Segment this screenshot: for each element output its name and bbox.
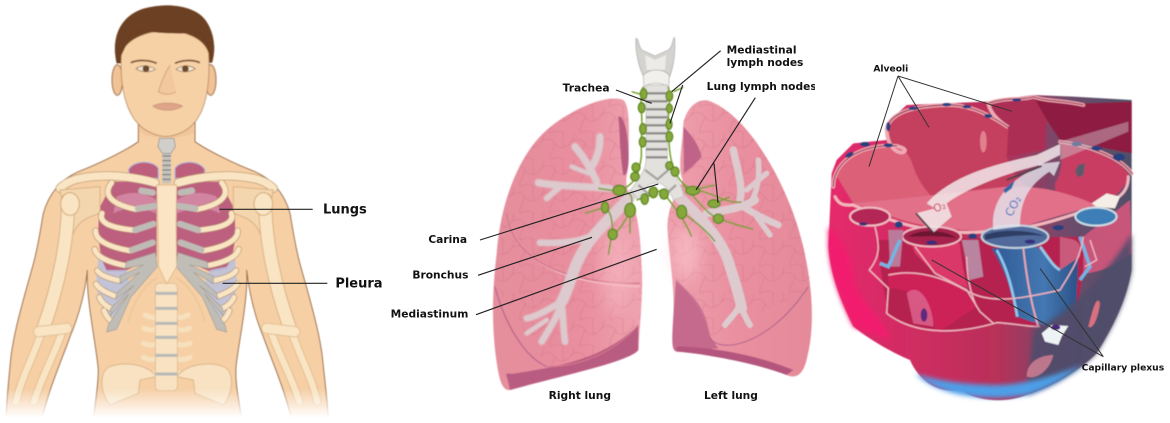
callout: lung lymph nodes xyxy=(696,80,817,203)
lymph nodes xyxy=(601,89,723,240)
callout: carina xyxy=(428,184,658,246)
skeleton left half xyxy=(16,176,157,405)
skeleton right half xyxy=(177,176,317,405)
rim membrane xyxy=(833,97,1132,233)
eyes and brows xyxy=(131,60,200,72)
callout: mediastinal lymph nodes xyxy=(670,43,803,123)
callout: alveoli: Alveoli xyxy=(873,63,908,74)
bottom fade xyxy=(0,388,347,423)
O2 arrow xyxy=(916,144,1060,233)
right lung xyxy=(493,99,642,390)
label: left lung: Left lung xyxy=(704,389,758,402)
nose xyxy=(158,65,176,94)
body silhouette xyxy=(6,120,328,420)
hair xyxy=(115,5,214,63)
mouth xyxy=(153,103,183,110)
left bronchial tree xyxy=(677,150,778,325)
sternum xyxy=(157,185,177,284)
small capillary rings xyxy=(850,208,1117,280)
capillary membrane strands xyxy=(869,227,1097,331)
back alveolus walls xyxy=(835,97,1132,231)
blue capillary tube xyxy=(982,225,1078,327)
callout: bronchus: Bronchus xyxy=(412,268,468,281)
callout: mediastinum: Mediastinum xyxy=(391,308,468,321)
O2 label: O₂ xyxy=(931,199,948,215)
CO2 arrow xyxy=(993,162,1060,230)
right bronchial tree xyxy=(527,137,632,342)
callout: mediastinum xyxy=(391,249,657,321)
callout: pleura: Pleura xyxy=(335,277,383,292)
trachea and larynx xyxy=(158,138,175,183)
neck shadow xyxy=(138,125,195,138)
lymph vessels xyxy=(585,87,753,255)
holes and pores xyxy=(980,131,1120,345)
blue nuclei on membrane xyxy=(844,98,1125,240)
callout: mediastinal lymph nodes: Mediastinal xyxy=(727,43,796,56)
callout: capillary plexus: Capillary plexus xyxy=(1082,363,1165,374)
lower wall shading xyxy=(828,227,1132,398)
callout: lung lymph nodes: Lung lymph nodes xyxy=(707,80,817,93)
label: right lung: Right lung xyxy=(549,389,611,402)
panel: lungs and lymph nodes xyxy=(391,37,817,402)
left lung xyxy=(667,100,812,376)
pink capillary tube xyxy=(902,227,968,288)
faint arrow band xyxy=(1060,122,1128,160)
callout: bronchus xyxy=(412,237,592,281)
hair backing xyxy=(115,5,214,63)
larynx xyxy=(636,37,675,87)
callout: trachea xyxy=(563,82,652,103)
callout: mediastinal lymph nodes: lymph nodes xyxy=(727,56,803,69)
callout: lungs: Lungs xyxy=(323,202,367,217)
callout: trachea: Trachea xyxy=(563,82,610,95)
trachea xyxy=(631,85,683,200)
face xyxy=(121,31,209,136)
callout: alveoli xyxy=(869,63,1012,167)
spine xyxy=(155,283,177,391)
callout: carina: Carina xyxy=(428,233,467,246)
panel: human torso anatomy xyxy=(0,5,383,423)
lungs in chest xyxy=(96,162,237,317)
outer wall xyxy=(828,95,1132,400)
panel: alveoli and capillary plexus xyxy=(828,63,1165,400)
callout: capillary plexus xyxy=(932,260,1165,374)
CO2 label: CO₂ xyxy=(1002,193,1024,219)
ears xyxy=(112,65,123,95)
lower capillary chamber xyxy=(877,200,1132,333)
